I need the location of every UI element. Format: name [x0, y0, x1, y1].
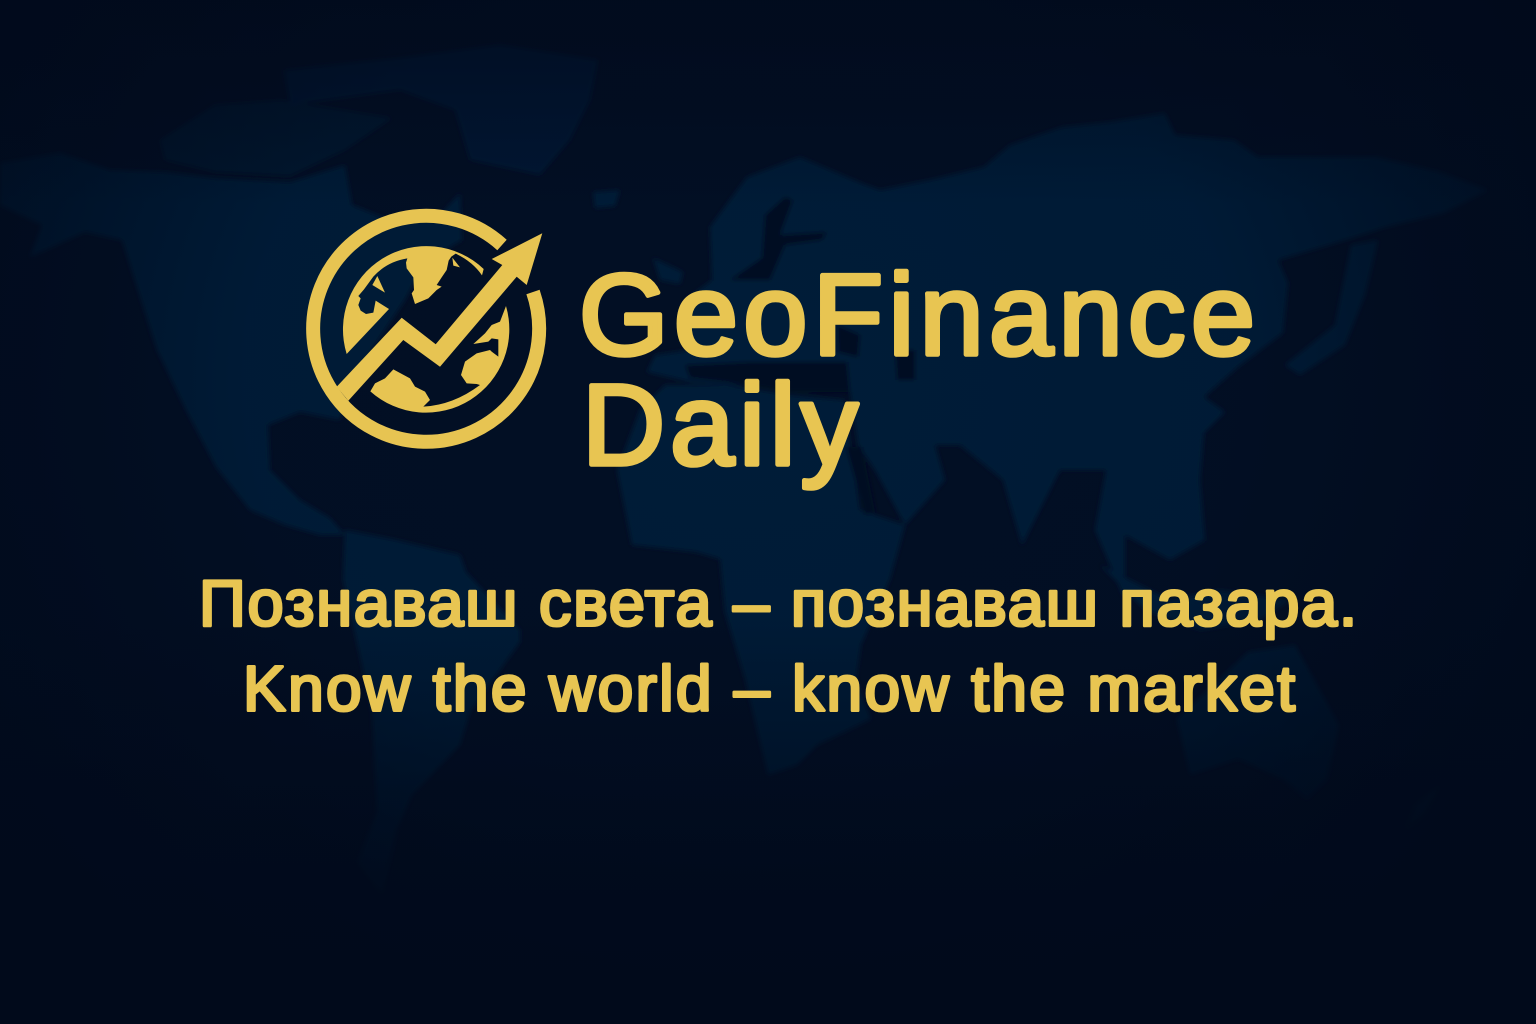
map: Arctic islands [160, 100, 392, 176]
map: Indonesia [1100, 565, 1290, 630]
map: Britain [653, 258, 683, 284]
logo rising arrow [337, 233, 542, 401]
map: South America [343, 530, 520, 895]
globe: right and bottom landmass with rim [370, 306, 509, 413]
map: Europe and Asia [647, 113, 1488, 600]
map: Caspian Sea [895, 350, 915, 380]
tagline: Bulgarian: Познаваш света – познаваш пазара. [199, 566, 1357, 640]
map: Black Sea [837, 325, 860, 357]
title line: GeoFinance: GeoFinance [579, 252, 1255, 380]
globe: sliver island [452, 258, 460, 267]
map: Japan [1285, 240, 1378, 375]
map: New Zealand [1405, 785, 1440, 830]
map: Baltic Sea [730, 197, 827, 280]
map: Red Sea [846, 447, 875, 515]
tagline [199, 566, 1357, 724]
map: Iceland [593, 190, 620, 208]
title [579, 252, 1255, 490]
logo [313, 216, 542, 442]
logo globe continents [343, 246, 509, 413]
globe: upper landmass and rim [343, 246, 484, 354]
map: Greenland [284, 45, 598, 175]
map: Mediterranean Sea [685, 362, 850, 392]
map: North America [0, 153, 462, 535]
map: Africa [617, 385, 905, 775]
tagline: English: Know the world – know the market [243, 652, 1295, 724]
logo ring [313, 216, 539, 442]
map: Australia [1177, 645, 1339, 799]
globe: small island [372, 276, 385, 293]
title line: Daily: Daily [582, 362, 858, 490]
